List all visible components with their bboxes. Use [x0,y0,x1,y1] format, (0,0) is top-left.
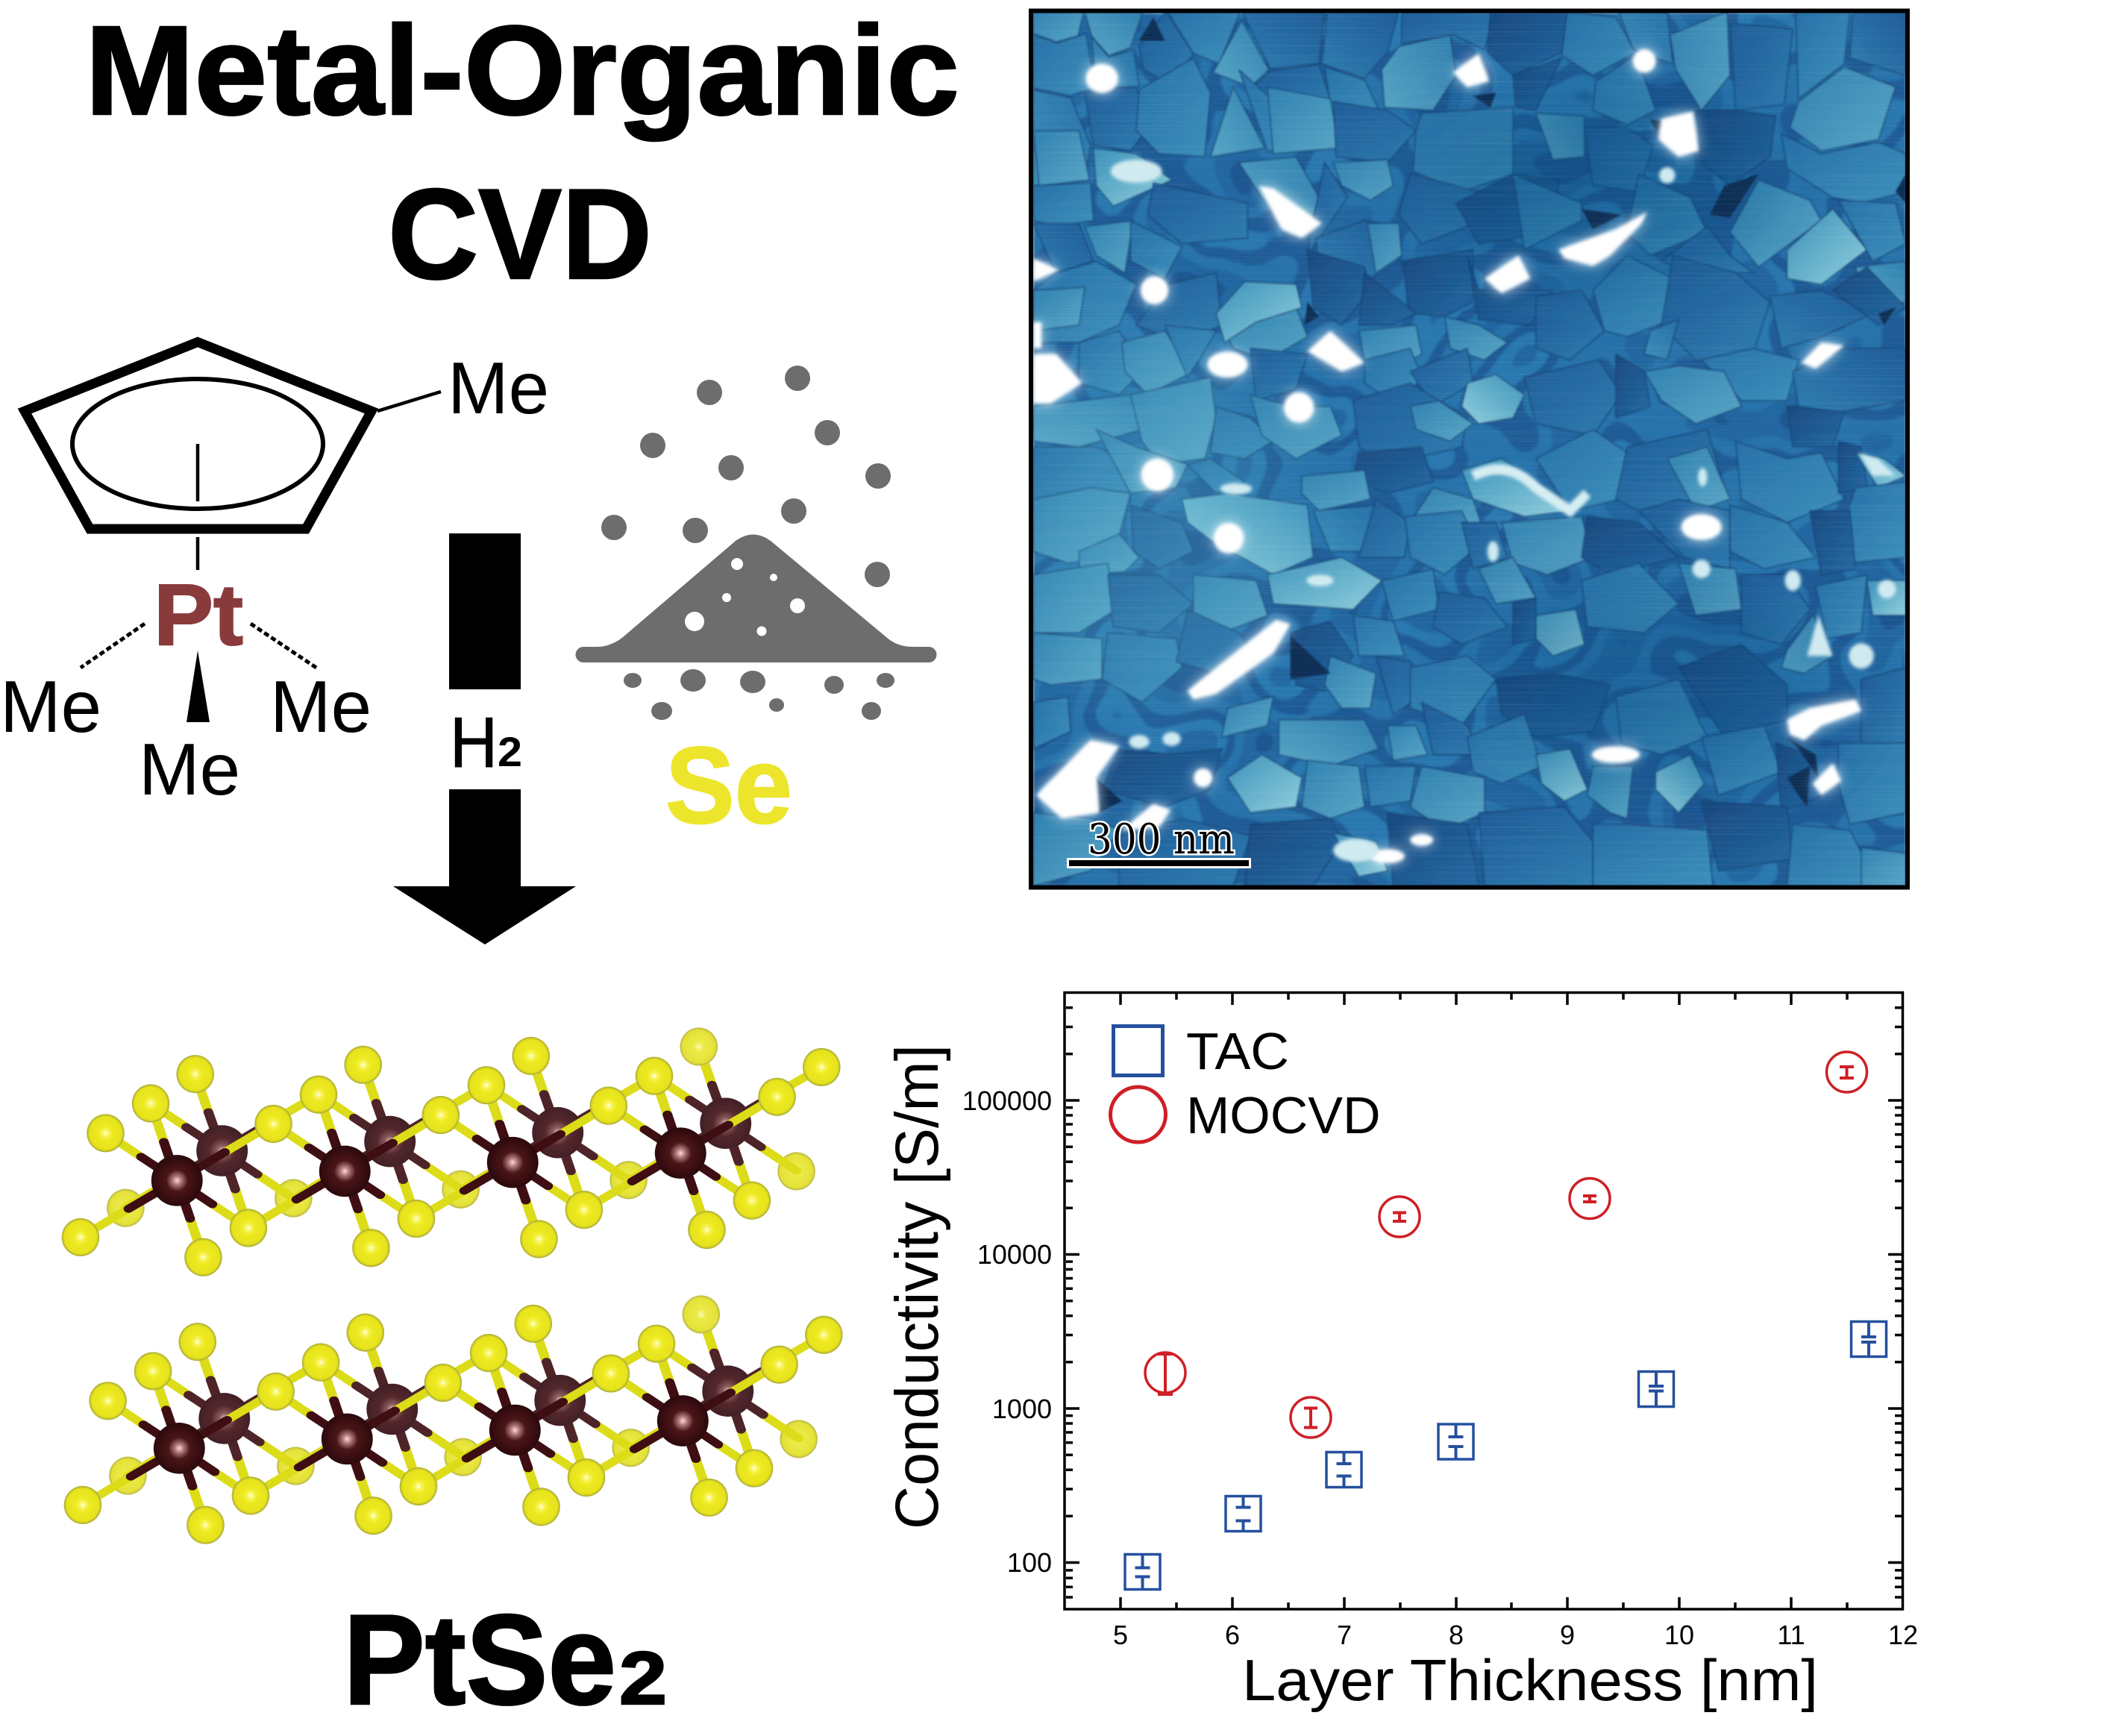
data series: MOCVD [1145,1052,1867,1438]
methyl label bottom: Me [139,728,240,810]
particles below pile [624,669,894,720]
data series: TAC [1125,1322,1886,1589]
H2 label: 2 [498,728,522,775]
y axis tick labels: 1000 [992,1394,1052,1424]
wedge bond [187,651,210,722]
ring methyl label: Me [448,347,549,429]
x axis tick labels: 5 [1113,1620,1128,1650]
bottom PtSe2 layer [64,1295,843,1544]
x axis tick labels: 6 [1225,1620,1240,1650]
x axis tick labels [1113,1620,1918,1650]
x axis title: Layer Thickness [nm] [1242,1647,1818,1713]
arrow upper shaft [449,533,521,689]
title: Metal-Organic CVD: CVD [388,163,652,306]
x axis tick labels: 11 [1777,1620,1805,1650]
cyclopentadienyl ring [25,342,441,570]
arrow lower shaft and head [393,789,576,944]
y axis tick labels: 100 [1007,1547,1052,1578]
floating powder particles [601,366,891,587]
panel: AFM micrograph [1028,10,1908,888]
arrow: reaction with H2 [393,533,576,944]
scale bar [1068,859,1250,867]
x axis tick labels: 7 [1337,1620,1352,1650]
top PtSe2 layer [62,1027,841,1276]
x axis tick labels: 9 [1560,1620,1575,1650]
x axis tick labels: 12 [1888,1620,1918,1650]
methyl label right: Me [270,665,372,748]
AFM image border [1031,10,1908,888]
y axis tick labels: 10000 [977,1239,1052,1270]
Se label: Se [665,724,792,846]
x axis tick labels: 10 [1664,1620,1694,1650]
crystal structure of PtSe2 [62,1027,843,1544]
title: Metal-Organic CVD [85,0,959,306]
legend label TAC: TAC [1186,1022,1289,1080]
label: PtSe2: PtSe [343,1588,616,1732]
legend marker MOCVD [1110,1087,1165,1142]
scale bar label: 300 nm [1088,815,1235,864]
plot frame and ticks [1065,992,1902,1609]
x axis tick labels: 8 [1449,1620,1464,1650]
label: PtSe2: 2 [619,1637,667,1720]
holes in pile [685,558,805,636]
y axis tick labels: 100000 [962,1085,1052,1116]
methyl label left: Me [0,665,101,748]
y axis tick labels [962,1085,1052,1578]
legend label MOCVD: MOCVD [1186,1086,1381,1144]
H2 label: H [450,703,498,783]
molecule: MeCpPtMe3 precursor [0,342,549,810]
title: Metal-Organic CVD: Metal-Organic [85,0,959,142]
AFM surface grains [1028,12,1906,886]
selenium powder pile icon [576,366,937,720]
dashed bonds to methyl groups [81,624,316,668]
powder pile [576,534,937,662]
legend marker TAC [1113,1027,1162,1076]
legend [1110,1022,1381,1144]
chart: conductivity vs layer thickness [883,992,1918,1713]
platinum label: Pt [154,566,243,663]
y axis title: Conductivity [S/m] [883,1044,951,1529]
